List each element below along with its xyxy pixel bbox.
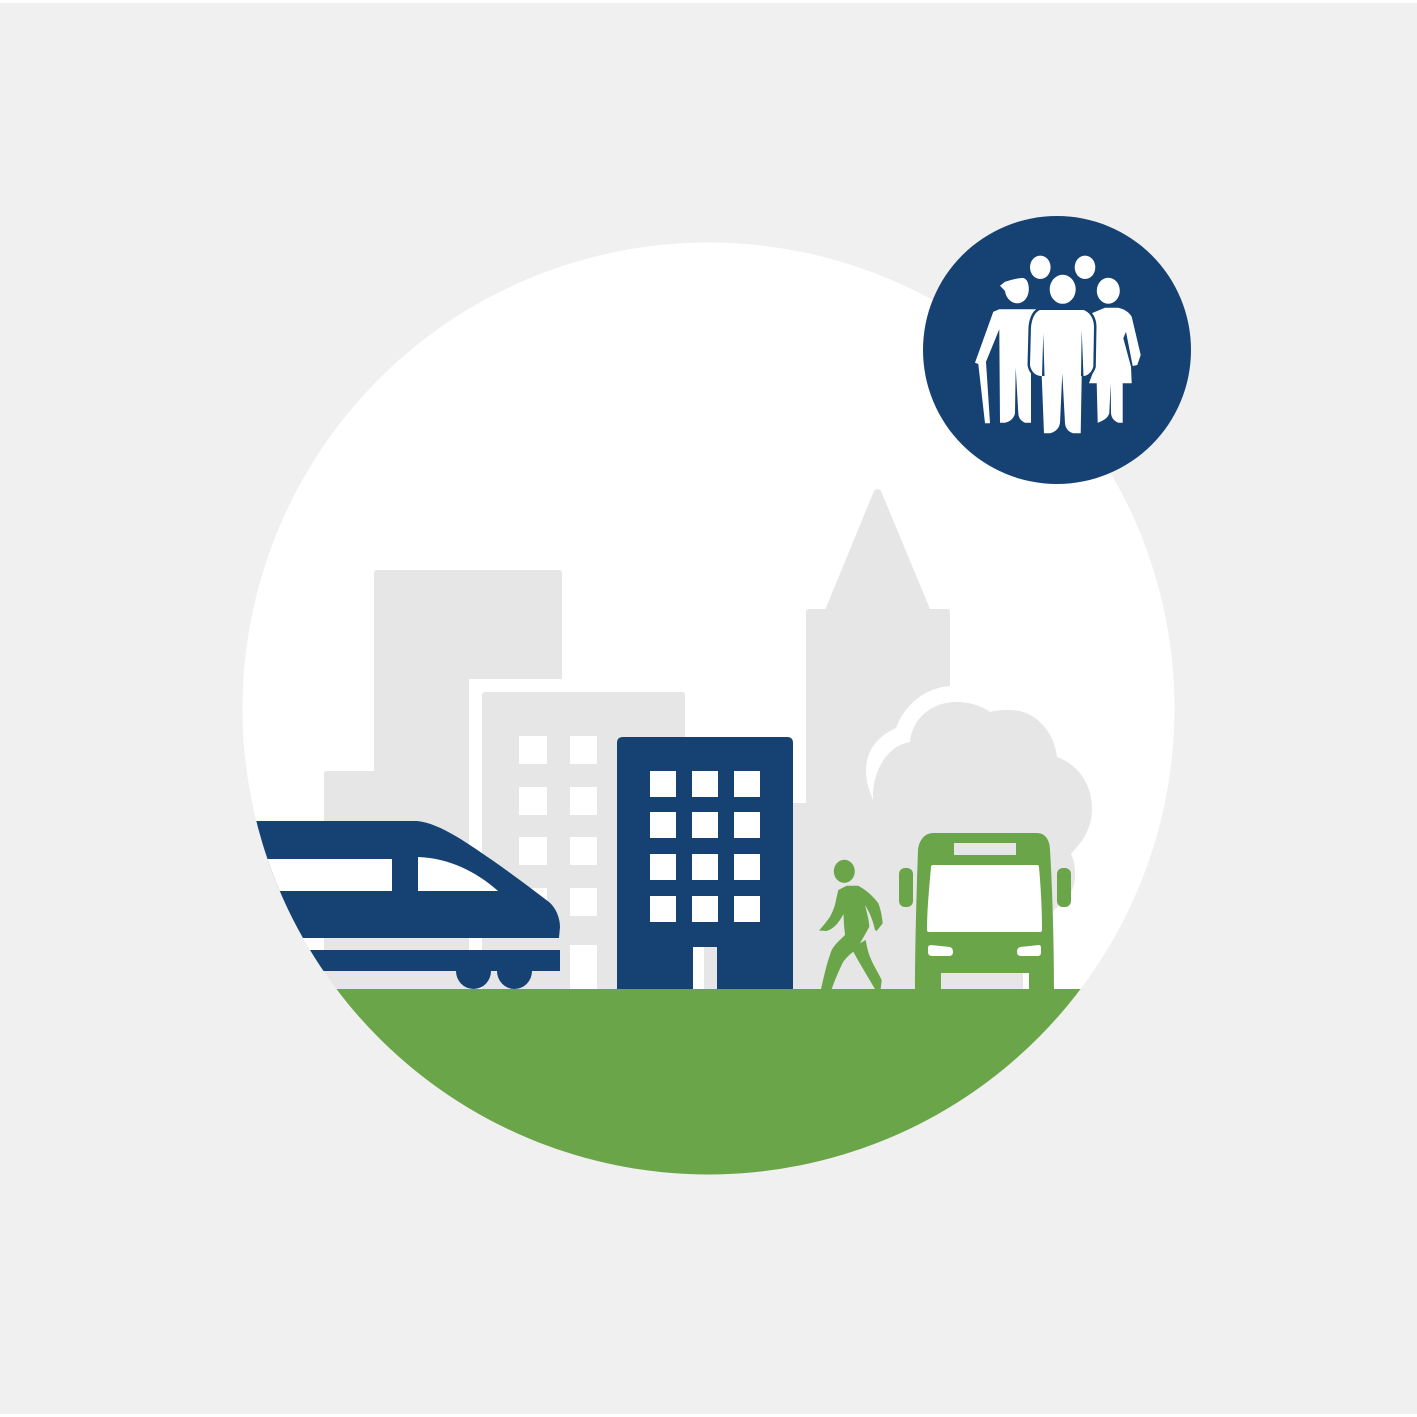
icon: blue office building	[617, 737, 793, 989]
city scene clipped to circle	[256, 489, 1092, 1174]
badge: people group	[923, 216, 1191, 484]
low building beside blue block	[793, 803, 806, 989]
ground	[336, 989, 1080, 1174]
badge circle	[923, 216, 1191, 484]
woman	[1089, 278, 1141, 423]
white circle backdrop	[242, 242, 1174, 1174]
background building with windows	[482, 692, 685, 989]
icon: tree	[873, 702, 1092, 989]
icon: group of people	[975, 256, 1141, 433]
background skyline: tall and low buildings	[324, 570, 562, 989]
central man	[1030, 275, 1094, 433]
white halo around tree	[866, 686, 950, 800]
elderly person with cane	[975, 278, 1036, 423]
icon: bus	[899, 833, 1071, 989]
icon: pedestrian	[819, 860, 883, 989]
background spire tower	[806, 489, 950, 803]
back heads	[1030, 256, 1095, 279]
icon: train	[230, 821, 560, 989]
